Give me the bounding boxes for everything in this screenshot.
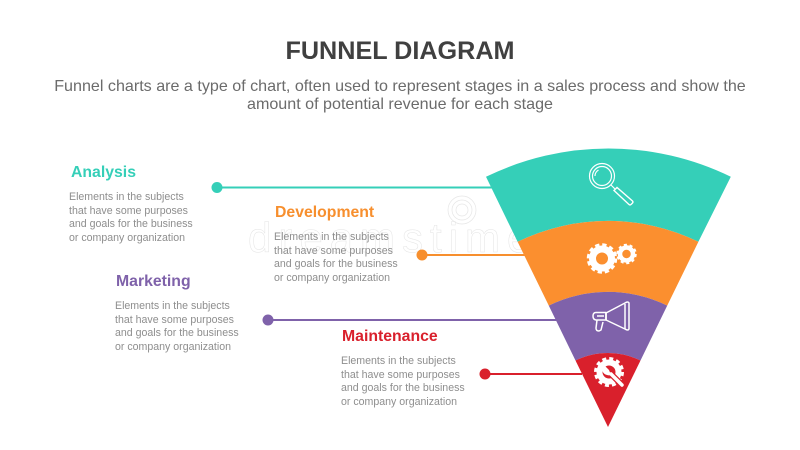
body: analysis: Elements in the subjects (69, 191, 184, 203)
connector: analysis (212, 182, 497, 193)
icon: megaphone (593, 302, 629, 331)
body: maintenance: or company organization (341, 396, 457, 408)
icon: gears (588, 245, 636, 272)
connector: maintenance (480, 368, 582, 380)
text block: marketing (115, 273, 239, 353)
body: marketing: or company organization (115, 341, 231, 353)
watermark: dreamstime (248, 214, 537, 261)
body: analysis: or company organization (69, 232, 185, 244)
body: development: Elements in the subjects (274, 231, 389, 243)
connector: marketing (262, 314, 558, 326)
segment: marketing (549, 292, 667, 360)
title: FUNNEL DIAGRAM (285, 37, 514, 65)
segment: development (518, 221, 698, 306)
body: marketing (115, 300, 239, 353)
text block: development (274, 204, 398, 284)
body: maintenance: that have some purposes (341, 369, 460, 381)
text block: analysis (69, 164, 193, 244)
body: maintenance: Elements in the subjects (341, 355, 456, 367)
body: analysis: that have some purposes (69, 205, 188, 217)
subtitle (54, 77, 746, 113)
text block: maintenance (341, 328, 465, 408)
body: marketing: that have some purposes (115, 314, 234, 326)
body: maintenance (341, 355, 465, 408)
body: marketing: Elements in the subjects (115, 300, 230, 312)
icon: gear and wrench (596, 358, 622, 386)
icon: magnifying glass (590, 164, 633, 205)
heading: marketing: Marketing (116, 273, 191, 290)
subtitle: amount of potential revenue for each stage (247, 95, 553, 113)
subtitle: Funnel charts are a type of chart, often used to represent stages in a sales process and show the (54, 77, 746, 95)
watermark spiral (448, 196, 476, 224)
heading: analysis: Analysis (71, 164, 136, 181)
body: analysis: and goals for the business (69, 218, 193, 230)
segment: analysis (486, 149, 731, 242)
segment: maintenance (576, 353, 640, 427)
body: development (274, 231, 398, 284)
body: development: that have some purposes (274, 245, 393, 257)
body: maintenance: and goals for the business (341, 382, 465, 394)
connector: development (416, 250, 530, 260)
heading: maintenance: Maintenance (342, 328, 438, 345)
body: marketing: and goals for the business (115, 327, 239, 339)
body: analysis (69, 191, 193, 244)
heading: development: Development (275, 204, 374, 221)
body: development: or company organization (274, 272, 390, 284)
body: development: and goals for the business (274, 258, 398, 270)
